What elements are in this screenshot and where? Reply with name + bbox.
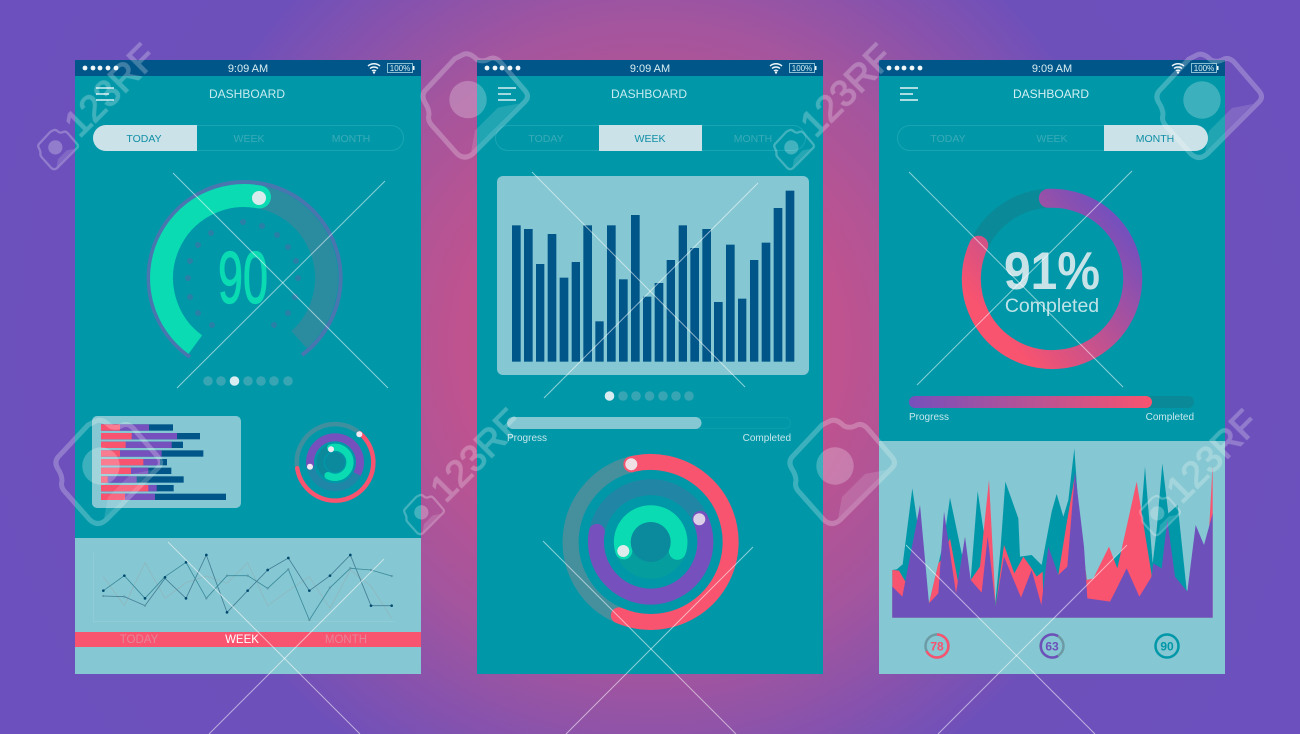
- bottom tab band: TODAY: [120, 634, 159, 646]
- icon: menu: [498, 88, 516, 100]
- watermark stamp top right: [1157, 54, 1262, 157]
- watermark text: 123RF: [56, 36, 164, 144]
- score badge 78: [926, 634, 948, 658]
- status bar: 9:09 AM: [1032, 63, 1072, 75]
- status bar: 9:09 AM: [630, 63, 670, 75]
- tabs: TODAY: [126, 133, 162, 145]
- icon: menu: [900, 88, 918, 100]
- gauge 90: 90: [218, 238, 268, 319]
- score badge 63: 63: [1045, 640, 1059, 654]
- phone 1 background: [75, 60, 421, 674]
- pagination dots: [203, 376, 293, 386]
- small watermark stamps: [38, 130, 1180, 535]
- tabs: [93, 125, 404, 151]
- panel: phone 2 week: [477, 60, 823, 674]
- watermark stamp lower left: [56, 420, 160, 524]
- area chart panel: [879, 441, 1225, 674]
- nested ring chart: [571, 458, 731, 622]
- phone 3 background: [879, 60, 1225, 674]
- watermark text: [56, 36, 1266, 510]
- tabs: TODAY: [528, 133, 564, 145]
- tabs: MONTH: [332, 133, 370, 145]
- watermark text: 123RF: [422, 401, 530, 509]
- status bar: [75, 60, 421, 76]
- donut chart 91% completed: 91%: [1004, 242, 1100, 301]
- progress bar: [507, 417, 791, 444]
- tabs: [496, 125, 806, 151]
- panel: phone 1 today: [75, 60, 421, 674]
- pagination dots: [605, 391, 694, 401]
- donut chart 91% completed: Completed: [1005, 295, 1099, 317]
- status bar: [477, 60, 823, 76]
- panel: phone 3 month: [879, 60, 1225, 674]
- horizontal bar chart card: [92, 416, 241, 508]
- bottom tab band: MONTH: [325, 634, 367, 646]
- donut chart 91% completed: [971, 198, 1133, 360]
- status bar: [879, 60, 1225, 76]
- score badge 78: 78: [930, 640, 944, 654]
- heading: dashboard: DASHBOARD: [1013, 87, 1089, 101]
- progress bar: Progress: [507, 433, 547, 444]
- watermark text: 123RF: [1158, 402, 1266, 510]
- phone 2 background: [477, 60, 823, 674]
- tabs: MONTH: [734, 133, 772, 145]
- heading: dashboard: DASHBOARD: [209, 87, 285, 101]
- tabs: WEEK: [635, 133, 665, 145]
- tabs: [898, 125, 1208, 151]
- bar chart card: [497, 176, 809, 375]
- progress bar: Progress: [909, 412, 949, 423]
- watermark cross lines: [168, 171, 1132, 734]
- progress bar: [909, 396, 1194, 423]
- small ring chart: [297, 424, 373, 501]
- tabs: WEEK: [234, 133, 264, 145]
- icon: menu: [96, 88, 114, 100]
- score badge 90: 90: [1160, 640, 1174, 654]
- watermark stamp top middle: [423, 54, 528, 157]
- status bar: 9:09 AM: [228, 63, 268, 75]
- tabs: TODAY: [930, 133, 966, 145]
- progress bar: Completed: [1146, 412, 1194, 423]
- bottom tab band: WEEK: [225, 634, 259, 646]
- status bar: 100%: [792, 64, 812, 73]
- progress bar: Completed: [743, 433, 791, 444]
- gauge 90: [149, 182, 341, 357]
- score badge 90: [1156, 634, 1178, 658]
- line chart panel: [75, 538, 421, 674]
- watermark stamp lower middle: [790, 420, 894, 524]
- status bar: 100%: [1194, 64, 1214, 73]
- bottom tab band: [75, 632, 421, 647]
- heading: dashboard: DASHBOARD: [611, 87, 687, 101]
- tabs: MONTH: [1136, 133, 1174, 145]
- watermark text: 123RF: [792, 36, 900, 144]
- score badge 63: [1040, 634, 1064, 658]
- tabs: WEEK: [1037, 133, 1067, 145]
- status bar: 100%: [390, 64, 410, 73]
